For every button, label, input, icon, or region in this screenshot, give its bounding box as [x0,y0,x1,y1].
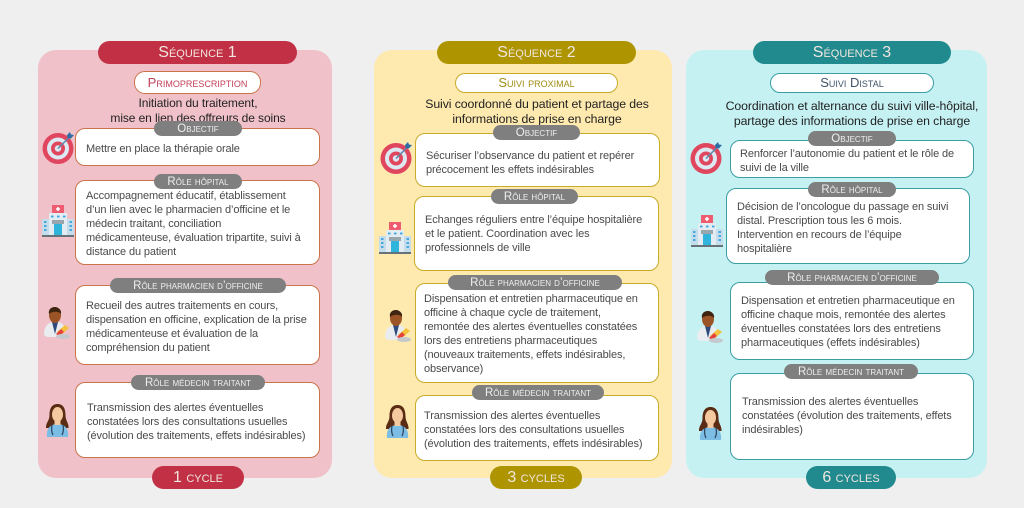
label: rôle pharmacien 1 [110,278,286,293]
box: rôle hôpital 2: et le patient. Coordination avec les [425,228,589,240]
subheading: suivi proximal [455,73,618,93]
box: rôle hôpital 1: d’un lien avec le pharmacien d’officine et le [86,204,290,216]
text: description séquence 2: informations de prise en charge [452,112,622,126]
label: rôle médecin 2: Rôle médecin traitant [485,387,591,399]
box: objectif 3: suivi de la ville [740,162,809,174]
heading: séquence 2 [437,41,636,64]
box: rôle médecin 1: (évolution des traitements, effets indésirables) [87,430,305,442]
box: rôle médecin 1 [75,382,320,458]
box: rôle médecin 1: Transmission des alertes éventuelles [87,402,263,414]
box: rôle hôpital 3: hospitalière [737,242,792,254]
footer: 3 cycles: 3 cycles [507,469,565,486]
subheading: suivi distal [770,73,934,93]
box: objectif 3 [730,140,974,178]
footer: 1 cycle: 1 cycle [173,469,223,486]
label: rôle hôpital 3 [808,182,896,197]
icon: target [42,132,74,164]
label: objectif 2 [493,125,580,140]
footer: 1 cycle [152,466,244,489]
box: rôle médecin 2: constatées lors des consultations usuelles [424,424,624,436]
box: rôle pharmacien 3: pharmaceutiques (effets indésirables) [741,337,920,349]
box: objectif 2: Sécuriser l’observance du patient et repérer [426,150,634,162]
icon: hospital [42,205,74,237]
box: rôle pharmacien 2: lors des entretiens pharmaceutiques [424,335,597,347]
subheading: suivi proximal: Suivi proximal [498,75,575,90]
label: rôle pharmacien 3: Rôle pharmacien d’officine [787,272,917,284]
box: rôle hôpital 2: professionnels de ville [425,242,530,254]
heading: séquence 2: Séquence 2 [497,44,576,61]
heading: séquence 1 [98,41,297,64]
icon: doctor [699,407,722,440]
box: rôle médecin 3: Transmission des alertes éventuelles [742,396,918,408]
subheading: primoprescription [134,71,261,94]
box: rôle pharmacien 2: remontée des alertes éventuelles constatées [424,321,637,333]
label: objectif 3 [808,131,896,146]
footer: 3 cycles [490,466,582,489]
label: rôle hôpital 3: Rôle hôpital [821,184,883,196]
label: rôle hôpital 1 [154,174,242,189]
label: objectif 1 [154,121,242,136]
label: rôle pharmacien 3 [765,270,939,285]
label: rôle pharmacien 2: Rôle pharmacien d’officine [470,277,600,289]
box: rôle hôpital 1 [75,180,320,265]
subheading: suivi distal: Suivi Distal [820,75,884,90]
box: rôle hôpital 3: Décision de l’oncologue du passage en suivi [737,200,948,212]
box: rôle hôpital 3 [726,188,970,264]
box: objectif 1 [75,128,320,166]
icon: pharmacist [697,311,723,343]
box: rôle hôpital 2 [414,196,659,271]
label: rôle médecin 2 [472,385,604,400]
box: rôle pharmacien 2: observance) [424,363,483,375]
subheading: primoprescription: Primoprescription [148,75,247,90]
text: description séquence 1: mise en lien des offreurs de soins [110,111,286,125]
box: objectif 2: précocement les effets indésirables [426,164,594,176]
box: objectif 3: Renforcer l’autonomie du patient et le rôle de [740,148,954,160]
label: rôle hôpital 2: Rôle hôpital [504,191,565,203]
icon: pharmacist [44,307,70,339]
text: description séquence 2 [425,97,649,126]
box: rôle pharmacien 2 [415,283,659,383]
box: rôle pharmacien 1: Recueil des autres traitements en cours, [86,300,278,312]
box: rôle médecin 3: constatées (évolution des traitements, effets [742,410,952,422]
icon: pharmacist [385,310,411,342]
box: rôle médecin 2: (évolution des traitements, effets indésirables) [424,438,642,450]
box: rôle pharmacien 2: officine à chaque cycle de traitement, [424,307,601,319]
icon: doctor [46,404,69,437]
icon: target [690,142,722,174]
label: rôle pharmacien 2 [448,275,622,290]
footer: 6 cycles [806,466,896,489]
label: objectif 2: Objectif [516,127,557,139]
panel: séquence 1 [38,50,332,478]
box: objectif 1: Mettre en place la thérapie orale [86,142,240,154]
box: rôle hôpital 2: Echanges réguliers entre l’équipe hospitalière [425,214,642,226]
box: rôle pharmacien 1 [75,285,320,365]
icon: hospital [691,215,723,247]
label: objectif 1: Objectif [177,123,219,135]
box: rôle médecin 2: Transmission des alertes éventuelles [424,410,600,422]
text: description séquence 3: Coordination et alternance du suivi ville-hôpital, [726,99,978,113]
label: rôle médecin 1 [131,375,265,390]
box: rôle pharmacien 3: officine chaque mois, remontée des alertes [741,309,946,321]
box: objectif 2 [415,133,660,187]
icon: target [380,142,412,174]
box: rôle hôpital 1: médecin traitant, conciliation [86,218,221,230]
label: rôle médecin 3 [784,364,918,379]
box: rôle hôpital 3: distal. Prescription tous les 6 mois. [737,214,902,226]
text: description séquence 3 [726,99,978,128]
box: rôle pharmacien 3: Dispensation et entretien pharmaceutique en [741,295,955,307]
box: rôle hôpital 1: distance du patient [86,246,176,258]
icon: doctor [386,405,409,438]
panel: séquence 2 [374,50,672,478]
box: rôle médecin 1: constatées lors des consultations usuelles [87,416,287,428]
heading: séquence 3: Séquence 3 [813,44,891,61]
box: rôle pharmacien 2: (nouveaux traitements, effets indésirables, [424,349,625,361]
box: rôle hôpital 3: Intervention en recours de l’équipe [737,228,902,240]
box: rôle médecin 3: indésirables) [742,424,803,436]
text: description séquence 3: partage des informations de prise en charge [734,114,970,128]
label: rôle hôpital 1: Rôle hôpital [167,176,229,188]
box: rôle pharmacien 2: Dispensation et entretien pharmaceutique en [424,293,638,305]
box: rôle pharmacien 1: médicamenteuse et évaluation de la [86,328,258,340]
label: objectif 3: Objectif [831,133,873,145]
label: rôle médecin 3: Rôle médecin traitant [798,366,904,378]
box: rôle pharmacien 3: éventuelles constatées lors des entretiens [741,323,941,335]
heading: séquence 1: Séquence 1 [158,44,237,61]
heading: séquence 3 [753,41,951,64]
label: rôle pharmacien 1: Rôle pharmacien d’officine [133,280,263,292]
footer: 6 cycles: 6 cycles [822,469,880,486]
box: rôle hôpital 1: médicamenteuse, évaluation tripartite, suivi à [86,232,301,244]
label: rôle hôpital 2 [491,189,578,204]
icon: hospital [379,222,411,254]
text: description séquence 1: Initiation du traitement, [139,96,257,110]
label: rôle médecin 1: Rôle médecin traitant [145,377,251,389]
panel: séquence 3 [686,50,987,478]
box: rôle médecin 3 [730,373,974,460]
box: rôle médecin 2 [415,395,659,461]
text: description séquence 2: Suivi coordonné du patient et partage des [425,97,649,111]
box: rôle pharmacien 3 [730,282,974,360]
box: rôle hôpital 1: Accompagnement éducatif, établissement [86,190,286,202]
text: description séquence 1 [110,96,286,125]
box: rôle pharmacien 1: compréhension du patient [86,342,210,354]
box: rôle pharmacien 1: dispensation en officine, explication de la prise [86,314,307,326]
